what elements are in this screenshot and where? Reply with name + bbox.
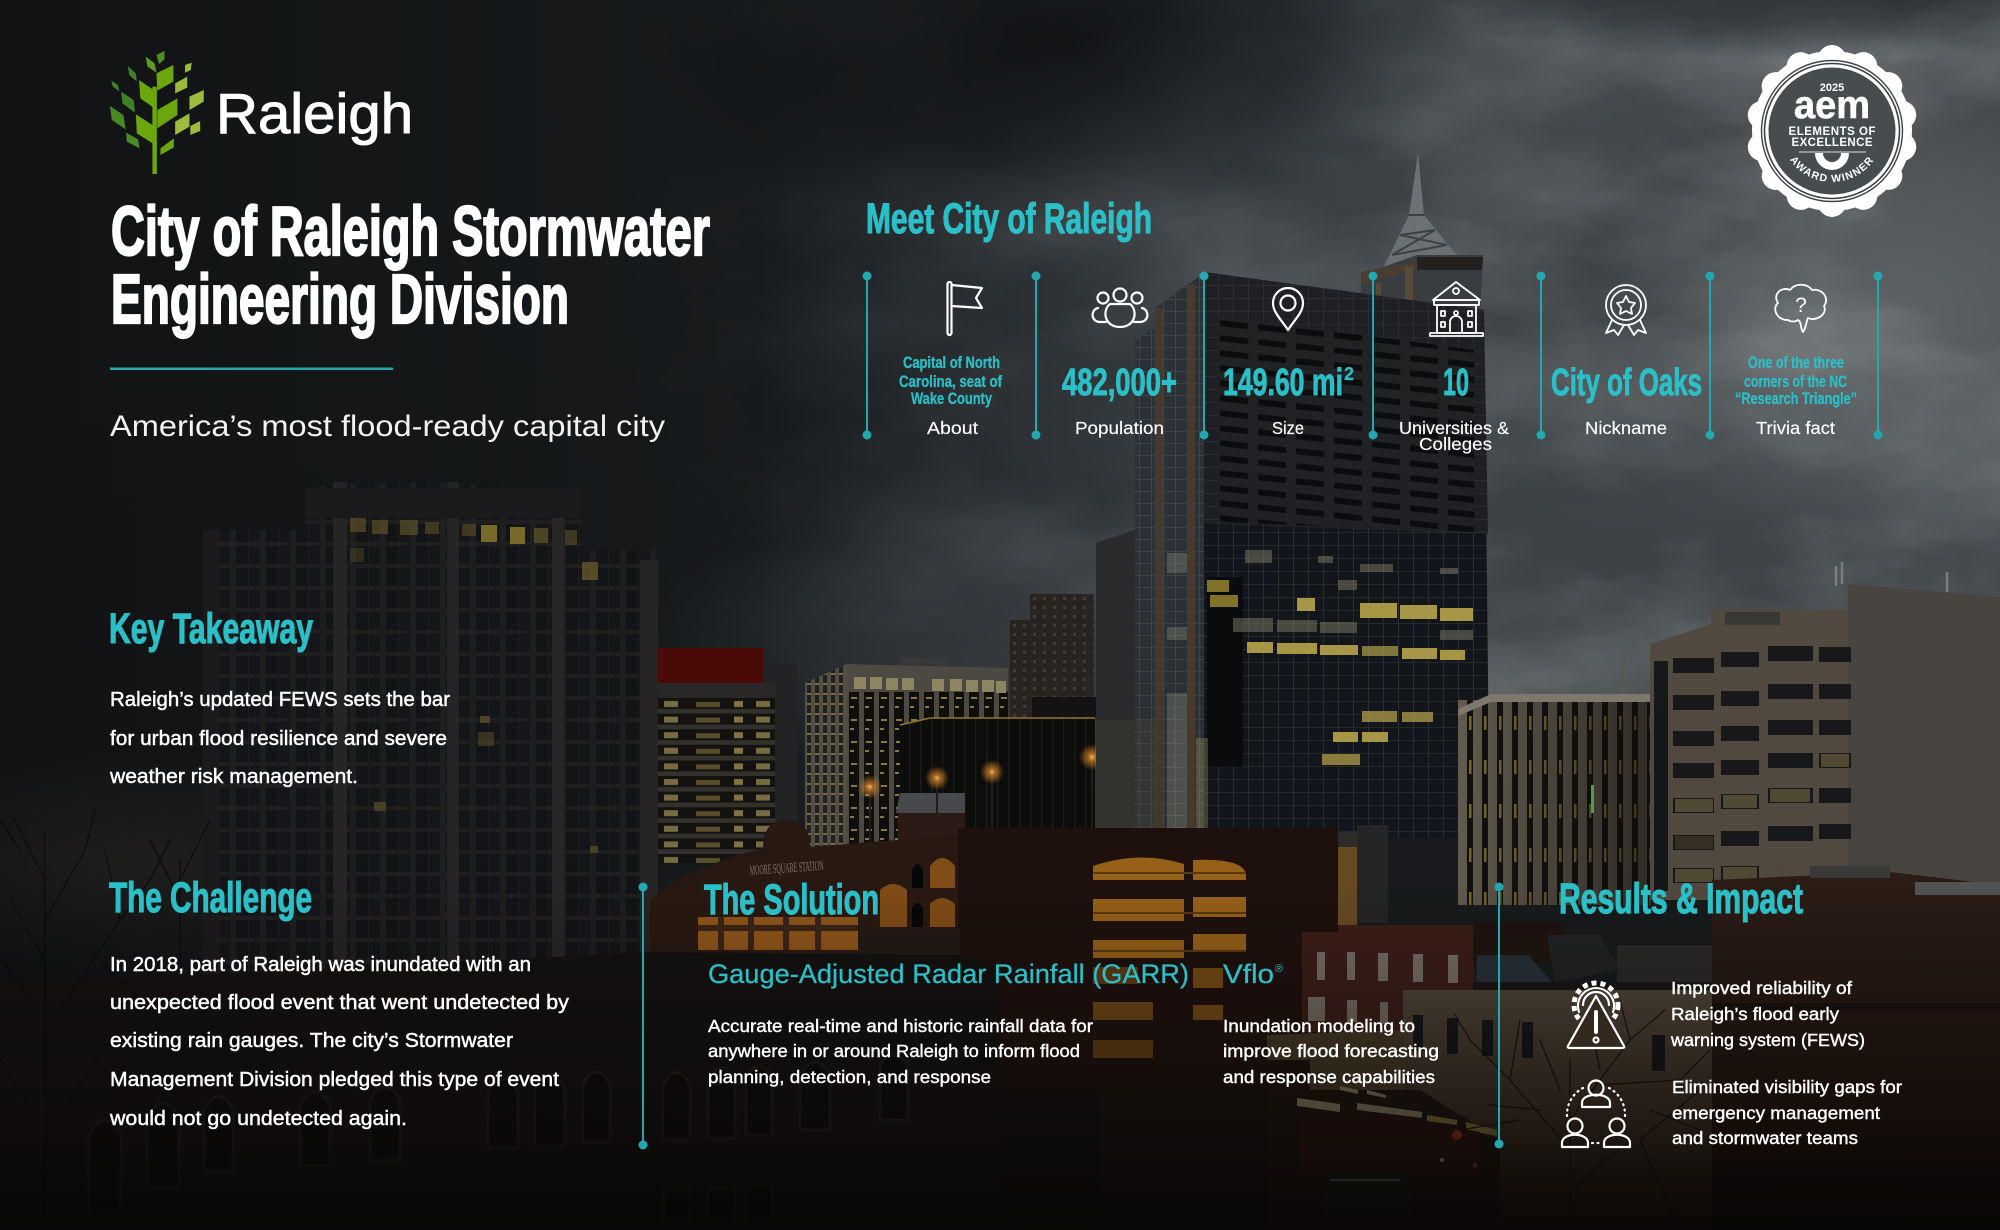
result text: FEWS reliability: warning system (FEWS) <box>1670 1030 1865 1050</box>
icon: award medal <box>1606 285 1646 335</box>
Vflo column: improve flood forecasting <box>1223 1041 1439 1061</box>
panel: The Solution: The Solution <box>704 876 879 924</box>
parking garage <box>958 825 1388 1078</box>
stat: Size <box>1223 288 1354 438</box>
icon: thought cloud with question mark: ? <box>1795 294 1807 317</box>
GARR column: planning, detection, and response <box>708 1067 991 1087</box>
stat: Universities and Colleges: 10 <box>1443 362 1469 404</box>
stat: About: Wake County <box>911 389 992 408</box>
result text: visibility gaps: Eliminated visibility gaps for <box>1672 1077 1902 1097</box>
panel: Key Takeaway: Key Takeaway <box>109 605 313 653</box>
panel: The Challenge: The Challenge <box>109 874 312 922</box>
stat: Nickname: City of Oaks <box>1551 362 1702 404</box>
stat: About: Carolina, seat of <box>899 372 1002 391</box>
stat: Trivia fact <box>1735 285 1857 438</box>
panel: The Challenge: existing rain gauges. The city’s Stormwater <box>110 1030 513 1052</box>
Vflo column: Vflo <box>1223 959 1274 989</box>
divider: solution and results <box>1496 884 1502 1148</box>
GARR column <box>708 959 1189 1087</box>
brick building at far right <box>1712 866 2000 1230</box>
icon: flag <box>948 282 982 335</box>
icon: school building <box>1430 282 1483 336</box>
stat: Trivia fact: Trivia fact <box>1756 418 1835 438</box>
Vflo column: ® <box>1275 963 1283 975</box>
cream high-rise at right <box>1650 562 2000 900</box>
stat: Size: Size <box>1272 418 1304 438</box>
Vflo column: and response capabilities <box>1223 1067 1435 1087</box>
stat: About: Capital of North <box>903 353 1000 372</box>
result text: FEWS reliability: Raleigh’s flood early <box>1671 1004 1839 1024</box>
badge text <box>1788 82 1876 149</box>
result text: FEWS reliability: Improved reliability of <box>1671 978 1852 998</box>
stat: Trivia fact: corners of the NC <box>1744 372 1847 391</box>
icon: connected team <box>1562 1080 1630 1147</box>
white-framed tower and dark block <box>805 658 1105 852</box>
subtitle: America’s most flood-ready capital city <box>110 410 665 443</box>
stat: Universities and Colleges: Universities & <box>1399 418 1509 438</box>
title: Engineering Division <box>111 260 569 338</box>
icon: Raleigh tree <box>110 51 204 174</box>
stat: Nickname: Nickname <box>1585 418 1667 438</box>
foreground dark building <box>0 952 1320 1230</box>
GARR column: Gauge-Adjusted Radar Rainfall (GARR) <box>708 959 1189 989</box>
title <box>111 192 710 338</box>
columned office building <box>1388 651 1658 905</box>
tall brown building behind <box>1010 594 1094 720</box>
panel: The Challenge: Management Division pledged this type of event <box>110 1069 559 1091</box>
red-roof building <box>658 648 797 863</box>
Vflo column: Inundation modeling to <box>1223 1016 1415 1036</box>
stat: Universities and Colleges <box>1399 282 1509 454</box>
divider: challenge and solution <box>640 884 646 1148</box>
result text: visibility gaps <box>1672 1077 1902 1148</box>
stat: Size: 2 <box>1344 364 1354 384</box>
GARR column: anywhere in or around Raleigh to inform flood <box>708 1041 1080 1061</box>
panel: Key Takeaway: for urban flood resilience and severe <box>110 728 447 750</box>
panel: Key Takeaway: weather risk management. <box>109 766 358 788</box>
panel: The Challenge: would not go undetected again. <box>109 1108 407 1130</box>
award badge: AEM Elements of Excellence: AWARD WINNER <box>1790 157 1874 182</box>
spire building <box>1361 153 1483 320</box>
bare trees <box>0 810 1710 1230</box>
GARR column: Accurate real-time and historic rainfall data for <box>708 1016 1093 1036</box>
panel: The Challenge <box>109 874 569 1130</box>
result text: FEWS reliability <box>1670 978 1865 1050</box>
stat: About: About <box>927 418 978 438</box>
Moore Square Station building: MOORE SQUARE STATION <box>749 859 824 879</box>
left high-rise <box>203 482 658 1102</box>
stat: Population: 482,000+ <box>1062 362 1177 404</box>
badge text: ELEMENTS OF <box>1788 126 1876 138</box>
panel: The Challenge: unexpected flood event that went undetected by <box>110 992 569 1014</box>
result text: visibility gaps: and stormwater teams <box>1672 1128 1858 1148</box>
icon: map pin <box>1273 288 1303 330</box>
Vflo column <box>1223 959 1439 1087</box>
panel: The Challenge: In 2018, part of Raleigh was inundated with an <box>110 954 531 976</box>
heading: Meet City of Raleigh: Meet City of Raleigh <box>866 195 1152 243</box>
badge text: 2025 <box>1820 82 1844 94</box>
icon: thought cloud with question mark <box>1775 285 1826 332</box>
stat: Nickname <box>1551 285 1702 438</box>
title: City of Raleigh Stormwater <box>111 192 710 270</box>
logo wordmark: Raleigh <box>216 82 413 146</box>
stat: Size: 149.60 mi <box>1223 362 1343 404</box>
panel: Key Takeaway <box>109 605 450 788</box>
panel: Key Takeaway: Raleigh’s updated FEWS sets the bar <box>110 689 450 711</box>
panel: The Solution <box>704 876 1439 1087</box>
icon: gear with warning triangle <box>1568 983 1624 1048</box>
icon: people <box>1093 288 1147 327</box>
award badge: AEM Elements of Excellence <box>1748 45 1916 217</box>
stat: Universities and Colleges: Colleges <box>1419 434 1492 454</box>
stat: Trivia fact: “Research Triangle” <box>1735 389 1857 408</box>
badge text: EXCELLENCE <box>1792 137 1873 149</box>
stat: Population <box>1062 288 1177 438</box>
main glass tower <box>1096 272 1490 864</box>
result text: visibility gaps: emergency management <box>1672 1103 1880 1123</box>
stat: Trivia fact: One of the three <box>1748 353 1844 372</box>
stat dividers <box>864 272 1882 438</box>
panel: Results and Impact: Results & Impact <box>1559 875 1803 923</box>
badge text: aem <box>1794 84 1870 127</box>
bus depot and buses <box>1267 1086 1500 1230</box>
panel: Results and Impact <box>1559 875 1902 1148</box>
low brick and cream buildings <box>1267 922 1712 1230</box>
logo: City of Raleigh <box>110 51 413 174</box>
stat: About <box>899 282 1002 438</box>
stat: Population: Population <box>1075 418 1164 438</box>
Moore Square Station building <box>650 820 960 970</box>
